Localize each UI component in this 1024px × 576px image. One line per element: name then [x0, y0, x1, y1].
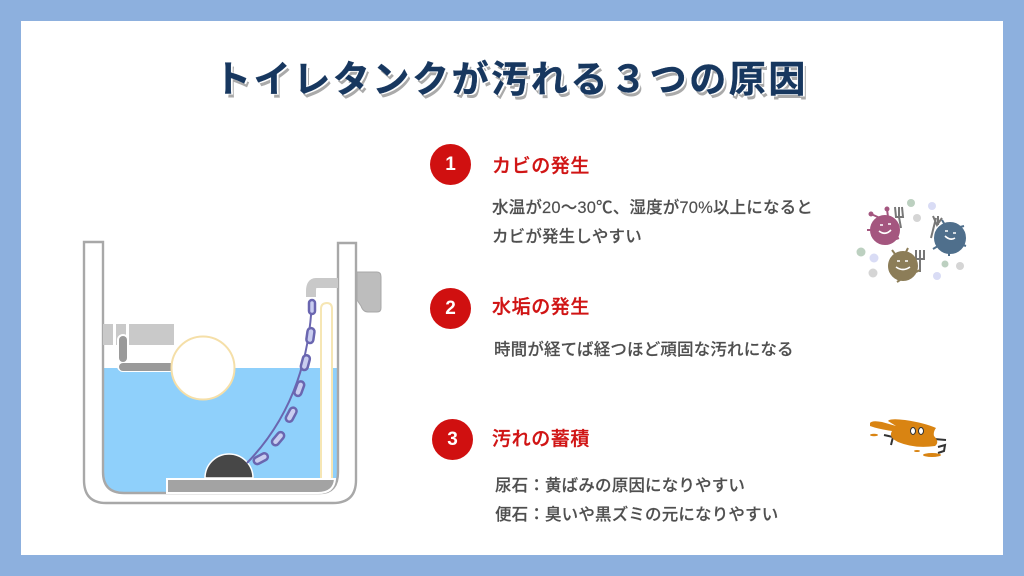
water [101, 368, 338, 494]
section 2 number: 2 [445, 298, 456, 319]
section 1 text: 水温が20～30℃、湿度が70%以上になると [492, 199, 813, 217]
flapper [205, 454, 253, 478]
section 1 number: 1 [445, 154, 456, 175]
float arm [123, 340, 170, 366]
fill valve block [103, 324, 174, 345]
inlet spout [311, 283, 338, 297]
float ball [172, 336, 234, 400]
section 2 text: 時間が経てば経つほど頑固な汚れになる [494, 341, 794, 359]
section 3 number [432, 419, 473, 460]
section 1 number [430, 144, 471, 185]
section 3 text: 便石：臭いや黒ズミの元になりやすい [495, 506, 778, 524]
section 2 number [430, 288, 471, 329]
section 3 text [495, 476, 778, 524]
chain [247, 300, 315, 465]
section 1 text: カビが発生しやすい [492, 228, 642, 246]
valve housing [357, 272, 381, 312]
section 3 text: 尿石：黄ばみの原因になりやすい [495, 477, 745, 495]
section 3 number: 3 [447, 429, 458, 450]
section 3 heading: 汚れの蓄積 [492, 429, 590, 450]
tank wall [84, 242, 356, 503]
overflow pipe [321, 303, 332, 479]
section 1 text [492, 198, 813, 246]
section 2 heading: 水垢の発生 [492, 297, 590, 318]
bottom plate [167, 479, 335, 493]
title: トイレタンクが汚れる３つの原因 [214, 59, 808, 100]
section 1 heading: カビの発生 [492, 156, 590, 177]
